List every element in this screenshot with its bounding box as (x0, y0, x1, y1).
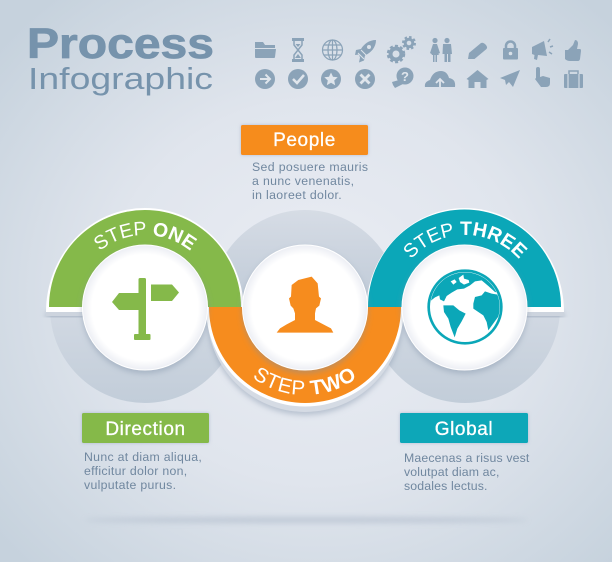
label: step three: STEP THREE (404, 222, 528, 259)
icon: cross circle (355, 69, 375, 89)
text block: people: in laoreet dolor. (252, 188, 342, 202)
tag: global: Global (435, 419, 493, 440)
icon: question bubble: ? (401, 69, 409, 84)
icon: hourglass (292, 38, 304, 62)
label: step one: STEP ONE (94, 222, 198, 250)
icon: rocket (355, 40, 376, 62)
text block: people (252, 160, 368, 202)
floor shadow (84, 517, 528, 523)
text block: global: Maecenas a risus vest (404, 451, 530, 465)
panel: step three disc (402, 245, 527, 370)
icon: signpost (112, 278, 179, 340)
tag: global (400, 413, 528, 443)
title: Process (27, 20, 214, 68)
text block: people: Sed posuere mauris (252, 160, 368, 174)
text block: global: sodales lectus. (404, 479, 488, 493)
title (27, 20, 214, 96)
icon set: top row (255, 37, 581, 62)
tag: people: People (273, 130, 336, 151)
panel: step two disc (242, 245, 368, 370)
tag: direction (82, 413, 209, 443)
icon: globe (427, 262, 503, 345)
label: step two: STEP TWO (254, 368, 354, 394)
icon: pointing hand (535, 67, 550, 87)
icon: suitcase (564, 71, 583, 88)
text block: people: a nunc venenatis, (252, 174, 354, 188)
icon set: bottom row (255, 67, 583, 89)
icon: check circle (288, 69, 308, 89)
tag: direction: Direction (105, 419, 186, 440)
panel: step one disc (82, 245, 208, 370)
icon: globe (322, 40, 342, 60)
text block: direction (84, 450, 202, 492)
icon: padlock (503, 42, 518, 60)
text block: direction: Nunc at diam aliqua, (84, 450, 202, 464)
icon: arrow circle (255, 69, 275, 89)
icon: person (277, 277, 333, 333)
icon: people (430, 38, 452, 62)
panel: step two arc (206, 307, 404, 418)
icon: cloud upload (425, 71, 455, 87)
panel: step one arc (44, 208, 243, 318)
icon: house (466, 70, 488, 88)
text block: global: volutpat diam ac, (404, 465, 500, 479)
icon: paper plane (500, 70, 520, 87)
text block: global (404, 451, 530, 493)
icon: star circle (321, 69, 341, 89)
text block: direction: vulputate purus. (84, 478, 176, 492)
icon: megaphone (532, 39, 553, 60)
icon: pencil (468, 43, 487, 59)
panel: grey backing half circles (50, 210, 560, 403)
panel: step three arc (367, 208, 566, 318)
text block: direction: efficitur dolor non, (84, 464, 188, 478)
icon: thumb up (565, 40, 581, 61)
tag: people (241, 125, 368, 155)
icon: gears (388, 37, 415, 62)
icon: folder (255, 42, 276, 58)
title: Infographic (28, 61, 213, 96)
icon: question bubble (392, 68, 414, 88)
